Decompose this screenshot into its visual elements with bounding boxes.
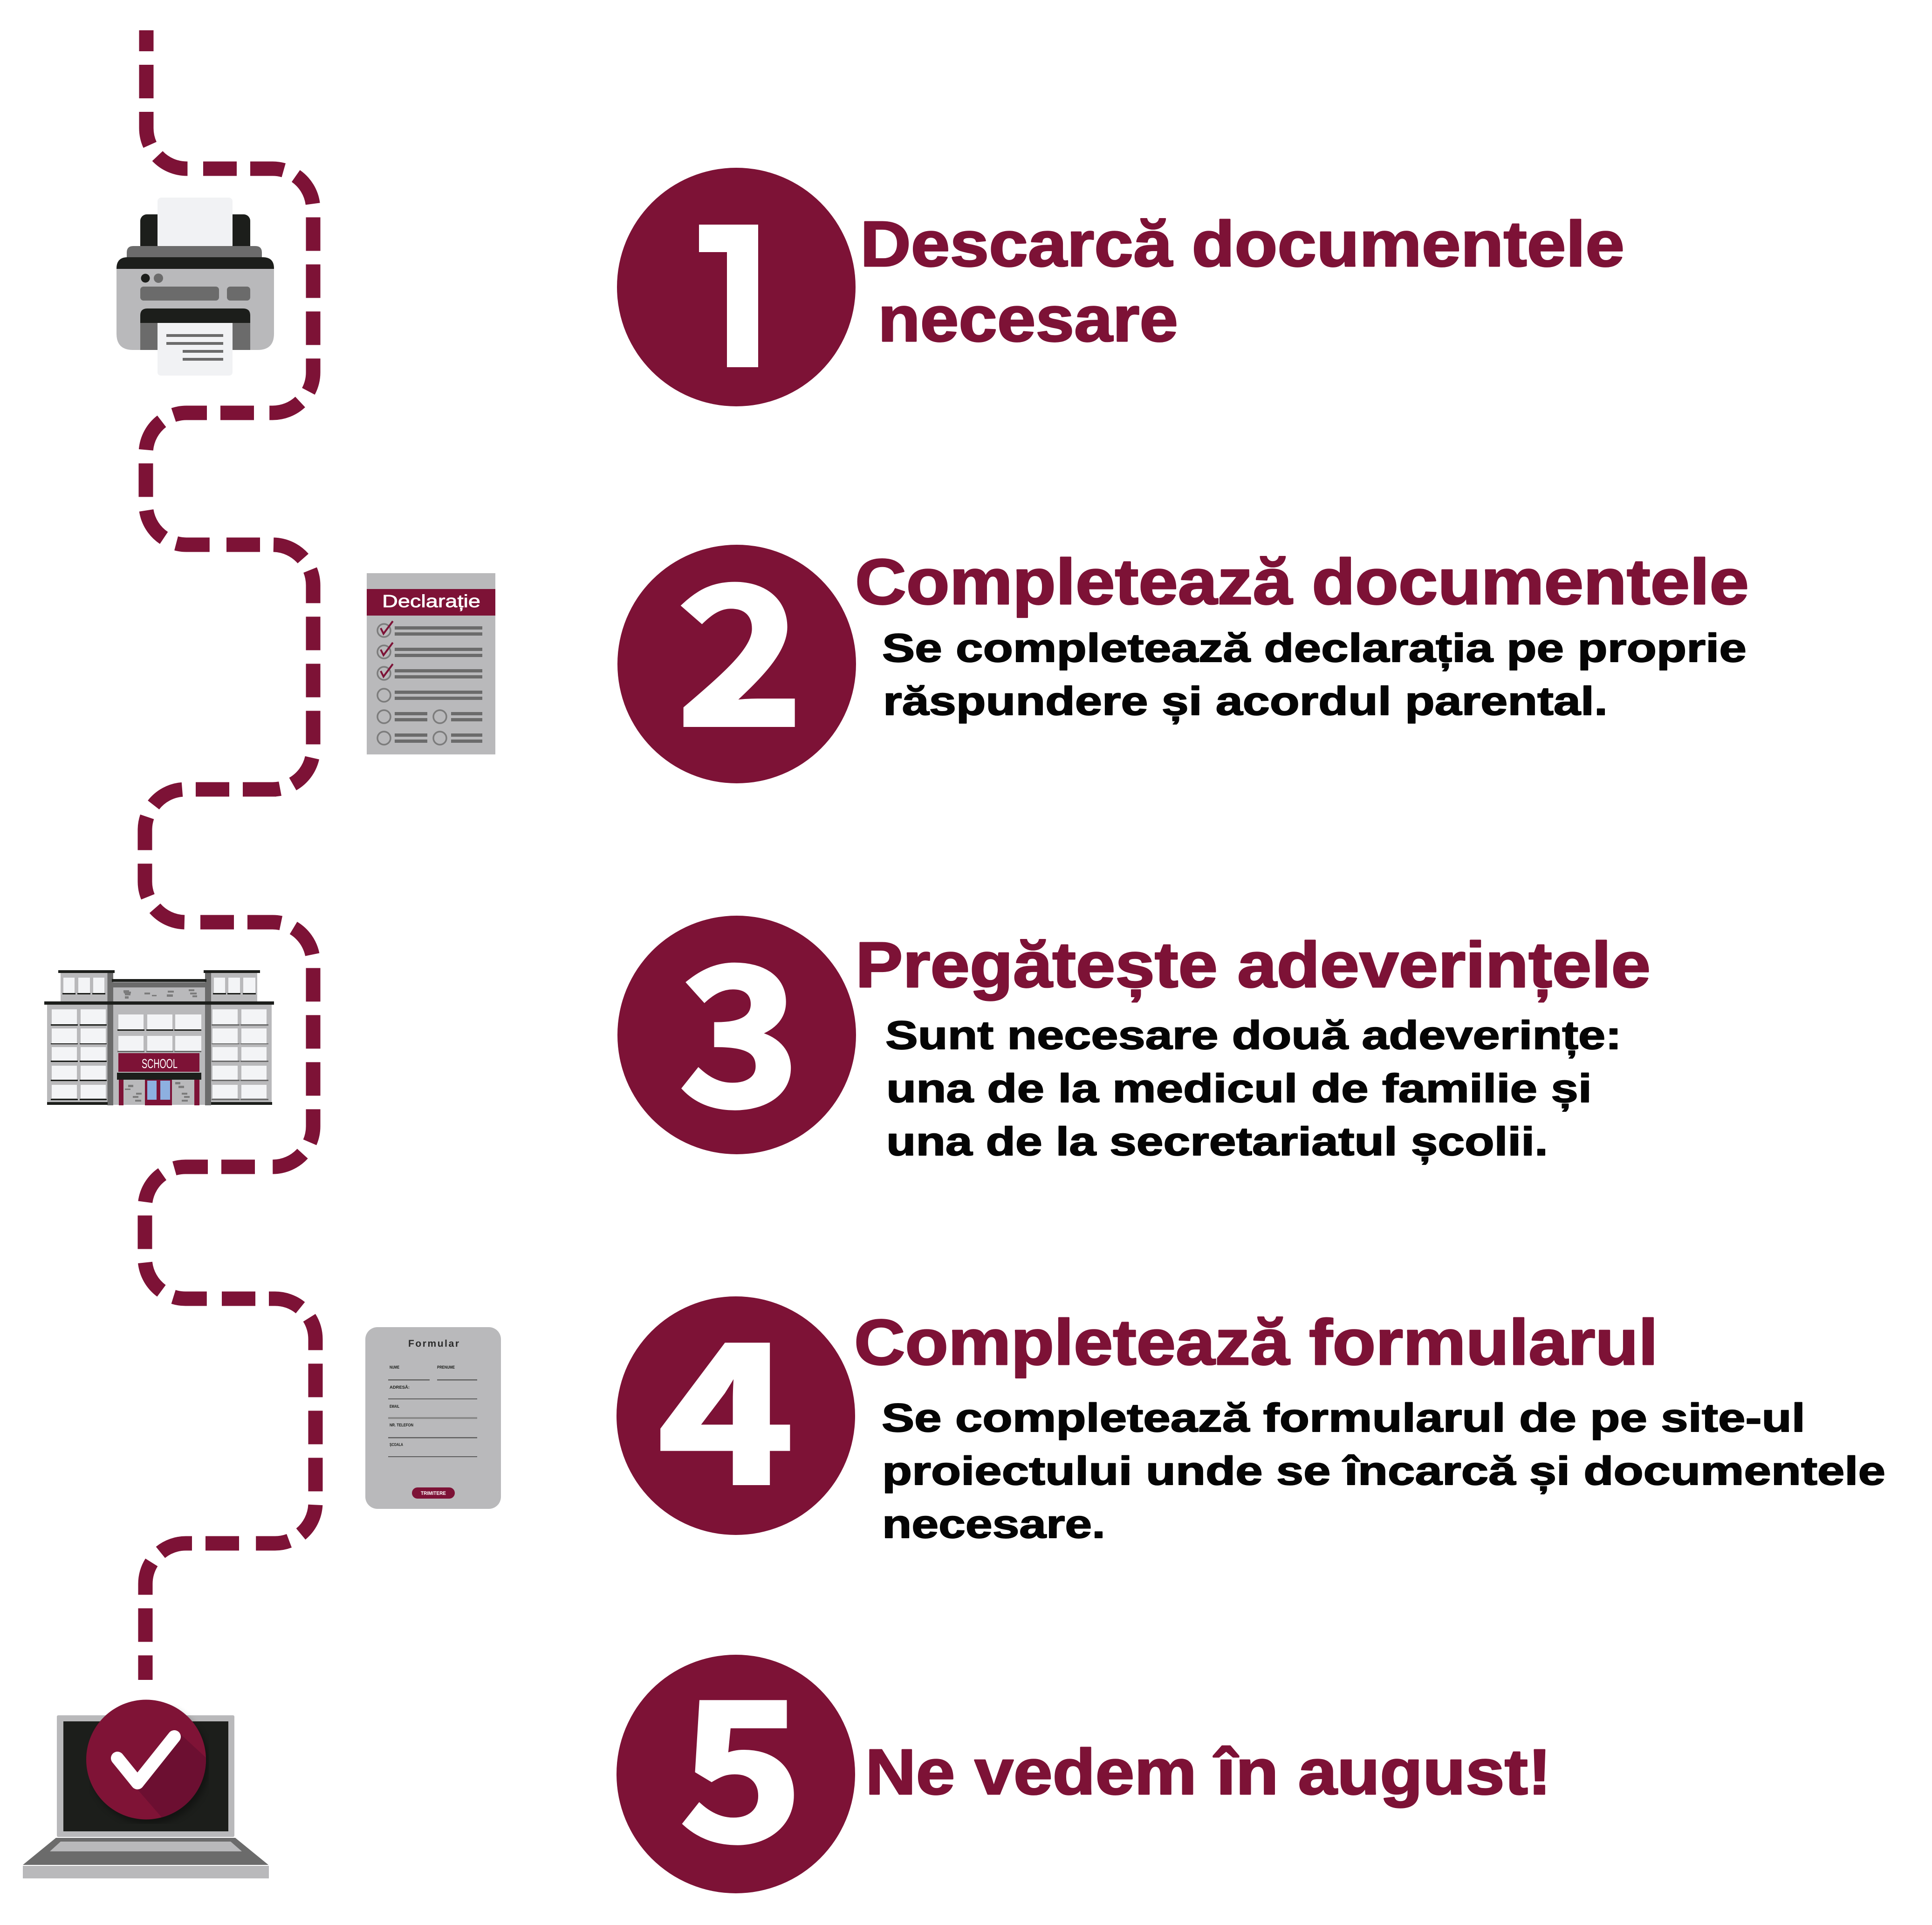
number badge 1 (617, 168, 856, 406)
heading 3: Pregătește adeverințele (856, 929, 1651, 1002)
description 4: proiectului unde se încarcă și documentele (882, 1449, 1885, 1494)
heading 2: Completează documentele (855, 546, 1749, 618)
number badge 5: 5 (680, 1619, 803, 1896)
icon: online form: TRIMITERE (421, 1491, 446, 1496)
description 2: răspundere și acordul parental. (883, 679, 1608, 724)
description 3: una de la medicul de familie și (886, 1066, 1592, 1111)
icon: online form: EMAIL (390, 1404, 399, 1409)
heading 5: Ne vedem în august! (865, 1736, 1551, 1808)
heading 4: Completează formularul (854, 1307, 1658, 1378)
icon: online form: PRENUME (437, 1365, 455, 1370)
number badge 2: 2 (677, 503, 803, 780)
description 3: una de la secretariatul școlii. (886, 1119, 1548, 1165)
icon: online form (365, 1327, 501, 1509)
number badge 3 (617, 884, 856, 1161)
number badge 1: 1 (681, 135, 799, 425)
icon: printer (116, 198, 274, 376)
step 3 (617, 884, 1651, 1165)
number badge 2 (617, 503, 856, 783)
icon: declaration form: Declarație (382, 592, 480, 611)
description 2: Se completează declarația pe proprie (882, 626, 1747, 671)
icon: online form: NR. TELEFON (390, 1423, 413, 1427)
icon: online form: NUME (390, 1365, 399, 1370)
step 2 (617, 503, 1749, 783)
step 1 (617, 168, 1623, 406)
step 5 (617, 1619, 1551, 1896)
number badge 3: 3 (679, 884, 800, 1161)
number badge 4 (617, 1261, 855, 1538)
icon: school building: SCHOOL (142, 1056, 178, 1071)
icon: laptop with check mark (23, 1700, 269, 1878)
icon: online form: Formular (408, 1338, 459, 1349)
icon: online form: ȘCOALA (390, 1442, 403, 1447)
description 4: Se completează formularul de pe site-ul (882, 1396, 1805, 1440)
description 3: Sunt necesare două adeverințe: (885, 1013, 1622, 1058)
number badge 5 (617, 1619, 855, 1896)
icon: declaration form (367, 573, 495, 754)
number badge 4: 4 (658, 1261, 794, 1538)
step 4 (617, 1261, 1885, 1547)
icon: school building (44, 970, 274, 1105)
icon: online form: ADRESĂ: (390, 1385, 410, 1390)
description 4: necesare. (882, 1502, 1105, 1547)
dashed route line (145, 30, 315, 1680)
heading 1: Descarcă documentele (860, 208, 1624, 280)
heading 1: necesare (878, 283, 1178, 355)
